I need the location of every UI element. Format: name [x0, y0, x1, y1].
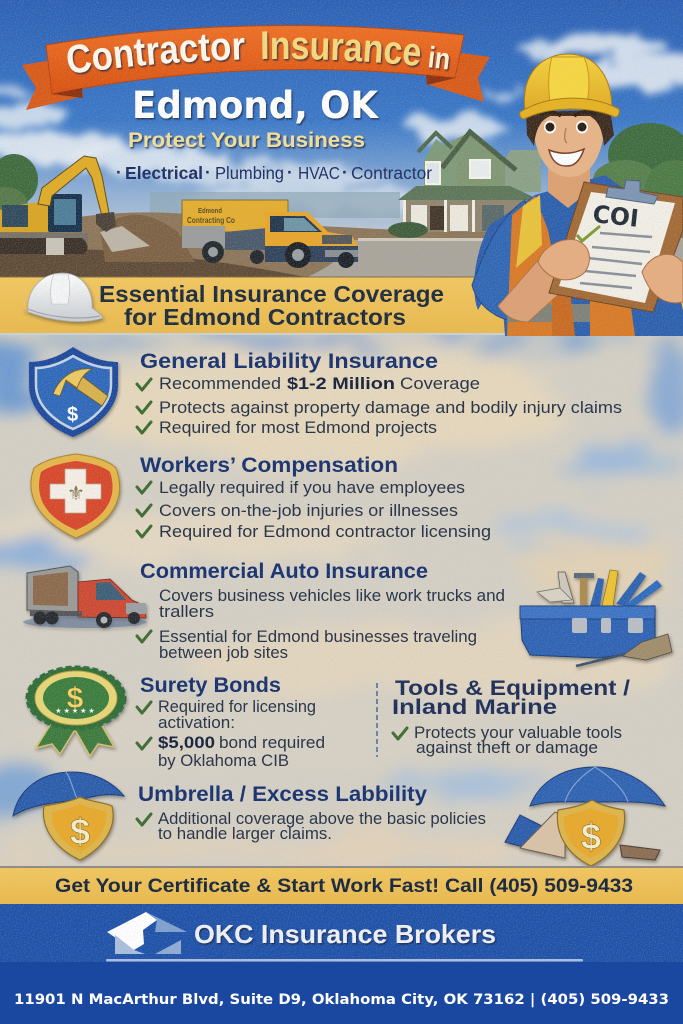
icon: red cross shield — [31, 454, 120, 538]
trades list: HVAC — [298, 163, 340, 183]
icon: blue hammer shield: $ — [67, 404, 78, 426]
construction worker with COI clipboard — [472, 54, 683, 336]
bullet: protects tools: against theft or damage — [416, 738, 598, 757]
footer band — [0, 904, 683, 1024]
background: sky — [0, 0, 683, 240]
bullet: bond amount: bond required — [219, 733, 325, 752]
right hand — [642, 254, 683, 303]
heading: Inland Marine — [392, 696, 557, 719]
heading — [392, 677, 630, 719]
icon: umbrella and gold shield left — [13, 772, 124, 860]
heading: Edmond, OK: Edmond, OK — [132, 84, 379, 127]
company name: OKC Insurance Brokers — [194, 919, 496, 949]
left ribbon tail — [22, 60, 84, 110]
hair — [526, 110, 614, 146]
icon: red box truck — [23, 566, 147, 628]
title text: in — [428, 46, 451, 72]
icon: umbrella and gold shield left: $ — [70, 811, 90, 852]
text: covers vehicles: Covers business vehicles like work trucks and — [159, 586, 505, 605]
bullet: protects tools — [393, 723, 622, 757]
bullet: traveling businesses: Essential for Edmond businesses traveling — [159, 627, 477, 646]
clipboard — [549, 180, 683, 312]
coverage: commercial auto — [23, 560, 672, 666]
gold band: essential coverage — [0, 273, 683, 335]
heading: Surety Bonds — [140, 674, 281, 697]
coverage: general liability — [29, 347, 622, 437]
bullet: required: Required for most Edmond projects — [159, 418, 437, 437]
bullet: recommended coverage: Coverage — [400, 374, 480, 393]
icon: blue hammer shield — [29, 347, 118, 437]
text: covers vehicles — [159, 586, 505, 621]
bullet: protects tools: Protects your valuable tools — [414, 723, 622, 742]
eyes and brows — [540, 112, 596, 143]
heading: General Liability Insurance — [140, 350, 438, 373]
call-to-action band: Get Your Certificate & Start Work Fast! Call (405) 509-9433 — [55, 876, 633, 897]
COI label: COI — [591, 200, 640, 233]
title ribbon banner — [22, 25, 490, 110]
coverage: workers compensation — [31, 454, 491, 541]
coverage: tools and equipment — [392, 677, 630, 757]
bullet: additional coverage: Additional coverage above the basic policies — [158, 809, 486, 828]
bullet: bond amount: $5,000 — [158, 733, 215, 752]
house — [388, 132, 541, 238]
heading: Commercial Auto Insurance — [140, 560, 428, 583]
checkmark — [577, 226, 600, 241]
bullet: bond amount — [137, 733, 325, 770]
bullet: additional coverage: to handle larger claims. — [158, 824, 332, 843]
icon: white hard hat — [23, 273, 103, 322]
icon: green dollar rosette — [27, 667, 125, 756]
icon: green dollar rosette: ★★★★★ — [55, 707, 97, 715]
ground with dirt and road — [0, 212, 683, 280]
delivery truck: Contracting Co — [187, 216, 235, 225]
background: sandy body — [0, 333, 683, 869]
icon: red cross shield: ⚜ — [67, 481, 85, 505]
right ribbon tail — [426, 53, 490, 102]
icon: green dollar rosette: $ — [67, 682, 84, 715]
trades list: · — [342, 162, 348, 182]
bullet: licensing activation: Required for licensing — [158, 697, 316, 716]
bullet: bond amount: by Oklahoma CIB — [158, 751, 289, 770]
bullet: additional coverage — [137, 809, 486, 843]
delivery truck — [182, 200, 358, 268]
delivery truck: Edmond — [198, 208, 222, 215]
clipboard lines — [580, 233, 652, 288]
band heading: Essential Insurance Coverage — [99, 281, 444, 307]
bullet: recommended coverage — [137, 374, 480, 393]
trades list — [116, 162, 432, 183]
icon: umbrella, shield and books right: $ — [581, 816, 601, 857]
icon: blue toolbox with tools — [520, 570, 672, 666]
bullet: recommended coverage: Recommended — [159, 374, 281, 393]
trades list: · — [116, 162, 122, 182]
smile — [549, 149, 584, 166]
bullet: traveling businesses — [137, 627, 477, 662]
excavator — [0, 156, 116, 255]
band heading: for Edmond Contractors — [124, 304, 406, 330]
title text: Contractor — [68, 34, 247, 76]
coverage: surety bonds — [27, 667, 325, 770]
trades list: Plumbing — [215, 163, 284, 183]
bullet: employees: Legally required if you have employees — [159, 478, 465, 497]
icon: umbrella, shield and books right — [505, 767, 665, 866]
subheading: Protect Your Business: Protect Your Business — [128, 128, 365, 152]
coverage: umbrella liability — [13, 767, 665, 866]
trades list: Electrical — [125, 163, 203, 183]
heading: Tools & Equipment / — [395, 677, 630, 700]
safety vest — [507, 195, 635, 336]
address line: 11901 N MacArthur Blvd, Suite D9, Oklahoma City, OK 73162 | (405) 509-9433 — [14, 992, 669, 1008]
bullet: traveling businesses: between job sites — [159, 643, 288, 662]
bullet: protects: Protects against property damage and bodily injury claims — [159, 398, 622, 417]
clipboard clip — [606, 180, 658, 204]
heading: Umbrella / Excess Labbility — [138, 783, 427, 806]
call-to-action band — [0, 866, 683, 904]
trades list: · — [205, 162, 211, 182]
left hand — [538, 240, 589, 280]
title text: Insurance — [262, 31, 422, 68]
face — [533, 112, 605, 177]
trades list: · — [287, 162, 293, 182]
bullet: licensing activation: activation: — [158, 713, 235, 732]
heading: Workers’ Compensation — [140, 454, 398, 477]
title text — [68, 31, 451, 76]
text: covers vehicles: trallers — [159, 602, 214, 621]
left forearm — [498, 258, 572, 322]
logo mark — [107, 912, 187, 954]
bullet: recommended coverage: $1-2 Million — [287, 374, 395, 393]
bullet: licensing: Required for Edmond contractor licensing — [159, 522, 491, 541]
bullet: licensing activation — [137, 697, 316, 732]
neck — [548, 168, 590, 208]
band heading — [99, 281, 444, 330]
trades list: Contractor — [351, 163, 432, 183]
bullet: injuries: Covers on-the-job injuries or illnesses — [159, 501, 458, 520]
trees — [0, 123, 683, 223]
worker torso and shirt — [474, 175, 683, 336]
yellow hard hat — [520, 54, 619, 119]
